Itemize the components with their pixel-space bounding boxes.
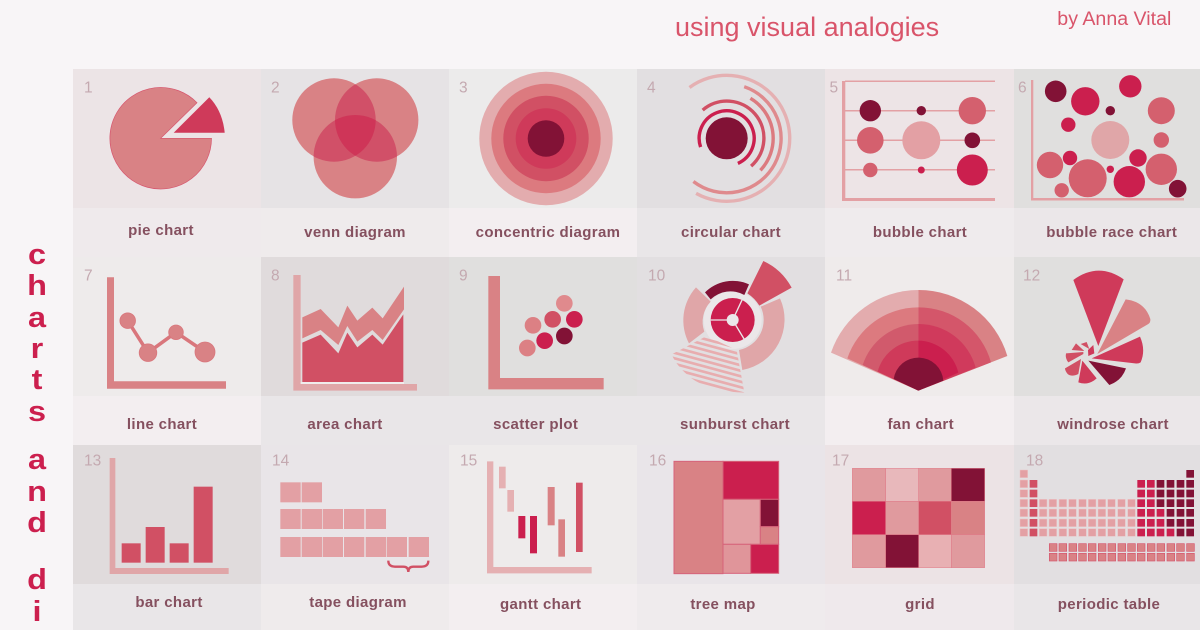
label: bubble race chart [1046,224,1177,241]
vertical side heading: a [28,301,47,334]
number 4: 4 [647,80,656,96]
panel: grid [825,445,1014,630]
number 15: 15 [460,452,477,470]
tree map graphic [674,461,779,574]
panel: circular chart [637,69,825,257]
bubble race graphic [1031,75,1186,200]
panel: bubble race chart [1014,69,1200,257]
vertical side heading: s [28,395,46,428]
panel: windrose chart [1014,257,1200,445]
scatter plot graphic [488,276,604,389]
number 11: 11 [836,268,852,284]
vertical side heading: r [31,332,43,365]
venn circles [292,78,418,198]
vertical side heading [27,238,47,628]
label: tree map [690,596,756,613]
label: line chart [127,416,197,433]
panel: sunburst chart [637,257,825,445]
number 18: 18 [1026,452,1043,470]
label: gantt chart [500,596,581,613]
panel: scatter plot [449,257,637,445]
author credit: by Anna Vital [1057,8,1171,30]
label: bar chart [135,594,203,611]
number 12: 12 [1023,268,1040,284]
line chart graphic [107,277,226,389]
number 1: 1 [84,80,93,96]
panel: gantt chart [449,445,637,630]
bubble chart graphic [842,80,995,201]
panel: line chart [73,257,261,445]
vertical side heading: c [28,238,46,271]
number 7: 7 [84,268,93,284]
panel: periodic table [1014,445,1200,630]
vertical side heading: a [28,443,47,476]
panel: fan chart [825,257,1014,445]
number 2: 2 [271,80,280,96]
label: grid [905,596,935,613]
label: venn diagram [304,224,406,241]
label: circular chart [681,224,781,241]
windrose graphic [1065,271,1150,385]
vertical side heading: h [27,269,47,302]
brace [388,561,428,572]
area chart graphic [293,275,417,391]
label: tape diagram [309,594,407,611]
label: area chart [307,416,383,433]
number 16: 16 [649,452,666,470]
circular arcs [690,75,790,201]
number 17: 17 [832,452,849,470]
periodic table graphic [1020,470,1194,561]
label: pie chart [128,222,194,239]
label: bubble chart [873,224,967,241]
number 13: 13 [84,452,101,470]
bar chart graphic [110,458,229,574]
sunburst graphic [672,261,792,392]
vertical side heading: d [27,563,47,596]
grid graphic [852,468,985,568]
label: fan chart [887,416,954,433]
number 10: 10 [648,268,666,284]
number 3: 3 [459,80,468,96]
number 8: 8 [271,268,280,284]
vertical side heading: t [32,363,42,396]
label: sunburst chart [680,416,790,433]
panel: venn diagram [261,69,449,257]
panel: bubble chart [825,69,1014,257]
label: windrose chart [1056,416,1169,433]
vertical side heading: i [32,595,42,628]
number 5: 5 [830,80,838,96]
panel: area chart [261,257,449,445]
vertical side heading: d [27,506,47,539]
title: using visual analogies [675,12,939,42]
number 6: 6 [1018,80,1027,96]
number 9: 9 [459,268,468,284]
label: concentric diagram [476,224,620,241]
tape diagram graphic [280,482,429,572]
concentric circles [479,72,613,205]
gantt chart graphic [487,461,592,573]
panel: bar chart [73,445,261,630]
label: periodic table [1058,596,1160,613]
vertical side heading: n [27,475,47,508]
panel: pie chart [73,69,261,257]
panel: concentric diagram [449,69,637,257]
label: scatter plot [493,416,578,433]
pie chart graphic [110,87,225,189]
panel: tree map [637,445,825,630]
panel: tape diagram [261,445,449,630]
number 14: 14 [272,452,290,470]
fan chart graphic [831,290,1007,391]
